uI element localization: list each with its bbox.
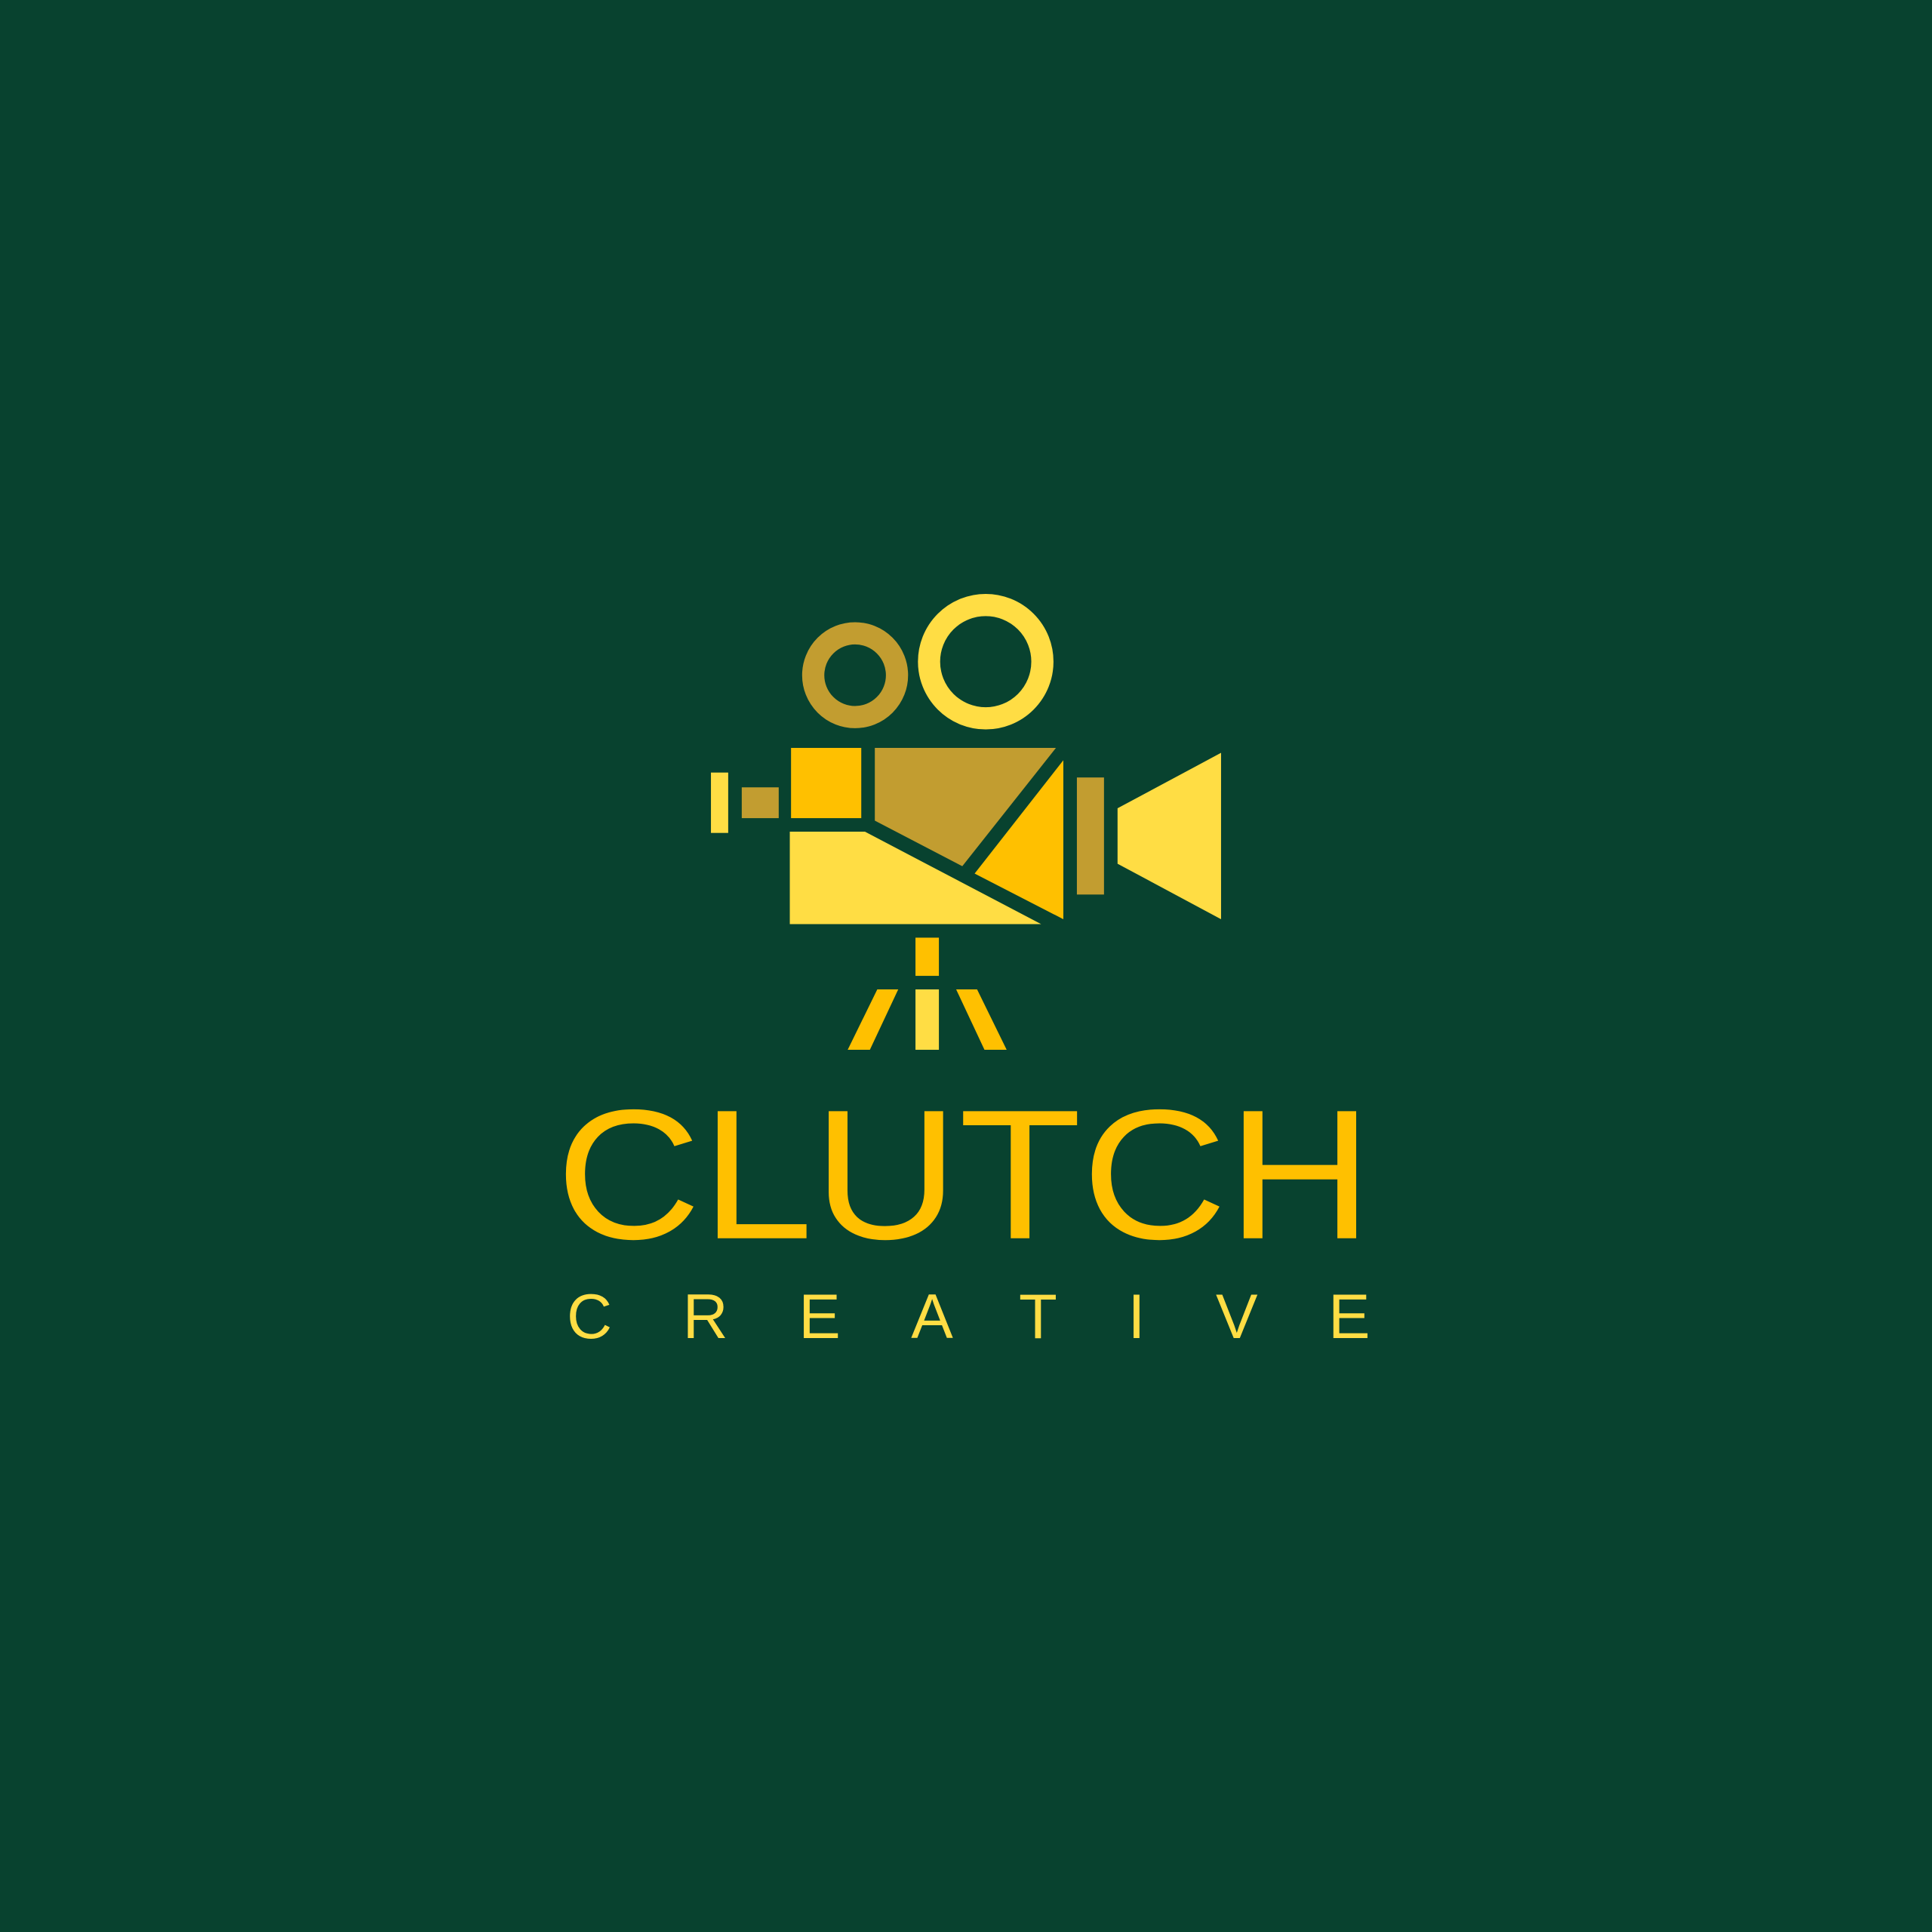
icon: lens bar — [1077, 777, 1104, 894]
icon: back handle bar — [711, 773, 728, 833]
icon: body right triangle — [974, 760, 1063, 919]
icon: tripod — [848, 937, 1007, 1050]
icon: large reel — [929, 605, 1042, 718]
icon: body upper trapezoid — [875, 748, 1056, 866]
subtitle: CREATIVE: CREATIVE — [567, 1281, 1371, 1352]
icon: body square — [791, 748, 861, 818]
icon: body lower — [790, 832, 1041, 924]
icon: back connector — [742, 787, 779, 818]
icon: film camera — [711, 605, 1221, 1050]
title: CLUTCH: CLUTCH — [555, 1071, 1373, 1278]
icon: lens hood — [1118, 753, 1221, 919]
icon: small reel — [814, 633, 897, 717]
